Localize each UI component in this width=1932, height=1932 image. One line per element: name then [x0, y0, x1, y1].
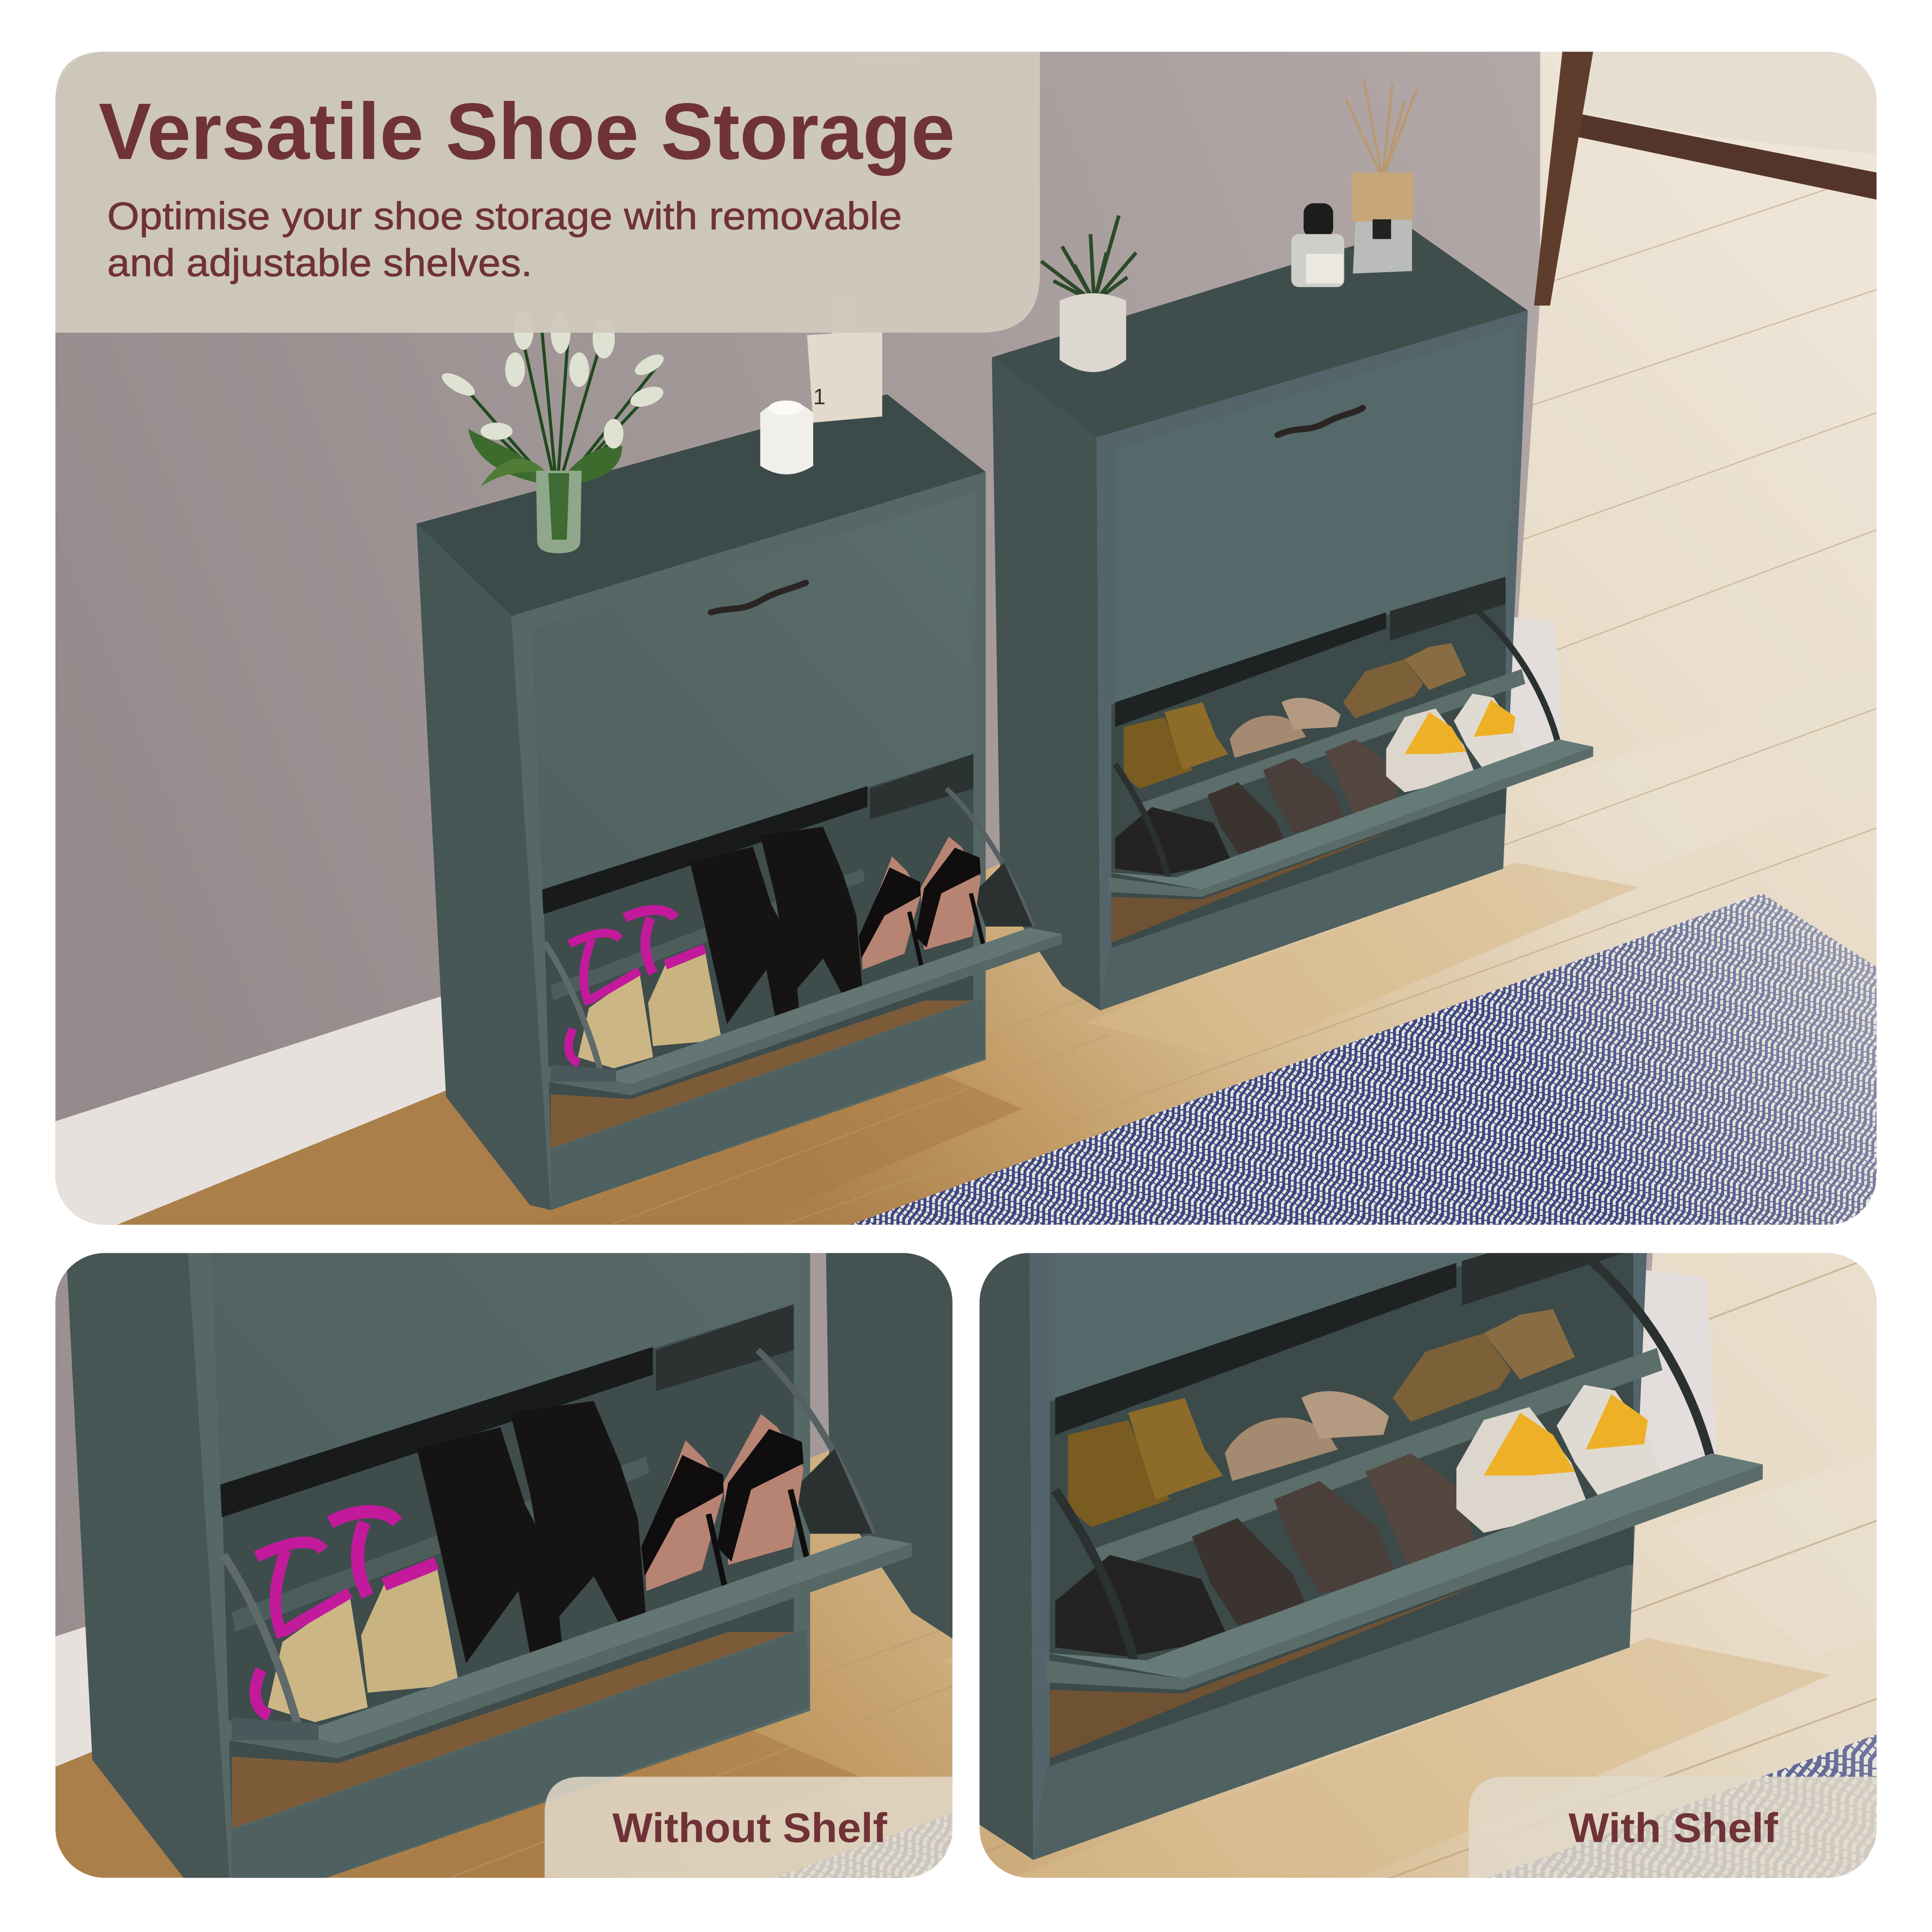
- left cabinet front: [511, 472, 986, 1210]
- reed diffuser: [1346, 81, 1417, 273]
- strap near: [568, 933, 639, 1063]
- right cabinet tray: [1109, 739, 1593, 897]
- potted succulent: [1041, 216, 1136, 372]
- right cabinet plinth: [1100, 813, 1503, 1010]
- baseboard: [0, 616, 1562, 1417]
- bottle: [807, 296, 882, 422]
- right hinges: [1115, 604, 1558, 877]
- heading: Versatile Shoe Storage: [99, 86, 955, 176]
- upper row: slides: [1230, 698, 1340, 758]
- bottle: 1: [813, 384, 826, 409]
- right cabinet top: [992, 228, 1528, 437]
- left cabinet top: [416, 394, 986, 616]
- cabinet: left: [416, 394, 1062, 1210]
- right hinge left cabinet: [946, 789, 1033, 927]
- perfume bottle: [1291, 204, 1344, 287]
- right cabinet interior: [1112, 577, 1506, 951]
- pink wedge sandals: [568, 910, 721, 1068]
- vase with lilies: [439, 310, 667, 553]
- cabinet: right: [992, 228, 1593, 1010]
- black ankle boots: [690, 827, 863, 1024]
- title panel: [55, 52, 1040, 333]
- right cabinet door: [1115, 327, 1518, 702]
- right cabinet handle: [1278, 408, 1363, 435]
- left cabinet tray: [548, 928, 1062, 1095]
- candle: [760, 401, 813, 474]
- subtitle: and adjustable shelves.: [107, 241, 532, 285]
- chair: [1534, 37, 1877, 306]
- upper row: boots: [1124, 702, 1228, 789]
- upper shoe shelf: [1140, 669, 1525, 819]
- right cabinet opening floor: [1112, 826, 1405, 942]
- wall: [0, 0, 1540, 1282]
- wedge far: [648, 950, 721, 1046]
- strap far: [625, 910, 705, 973]
- left cabinet door: [532, 493, 976, 890]
- patterned rug: [850, 893, 1932, 1479]
- label: Without Shelf: Without Shelf: [612, 1805, 887, 1851]
- open floor below tray: [551, 1000, 973, 1148]
- lower row: sneakers: [1386, 694, 1528, 792]
- left cabinet handle: [711, 583, 806, 612]
- panel: main room scene: [55, 52, 1877, 1225]
- wedge near: [578, 972, 653, 1068]
- shelf guide: [551, 869, 865, 1000]
- left cabinet side: [416, 524, 551, 1210]
- right cabinet front: [1097, 310, 1528, 1010]
- lower row: oxfords: [1115, 739, 1400, 875]
- left hinge: [544, 942, 600, 1069]
- left cabinet plinth: [551, 998, 984, 1210]
- left cabinet interior: [544, 754, 973, 1148]
- label background: [544, 1777, 952, 1878]
- label background: [1469, 1777, 1877, 1878]
- round mirror edge: [823, 12, 951, 61]
- black pink-soled heels: [859, 837, 983, 970]
- subtitle: Optimise your shoe storage with removable: [107, 194, 902, 238]
- label: With Shelf: With Shelf: [1568, 1805, 1778, 1851]
- upper row: sandals: [1343, 643, 1466, 718]
- right cabinet side: [992, 357, 1100, 1010]
